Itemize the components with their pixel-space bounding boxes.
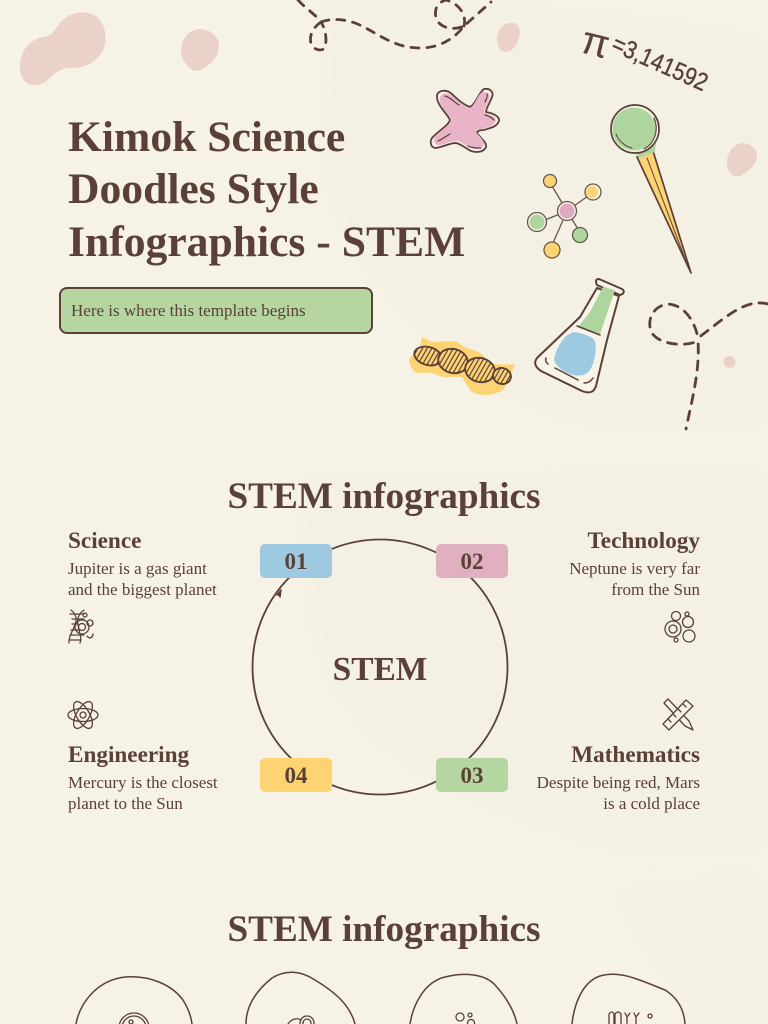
shape: bottom blob 2 [246,972,355,1024]
icon: dna [409,337,515,395]
badge 04 [260,758,332,792]
pink blob: top centre [497,23,520,52]
pi formula: =3,141592 [608,30,712,97]
text: science: Jupiter is a gas giant [68,559,207,578]
pi formula [577,18,712,97]
heading: section 3: STEM infographics [227,909,541,950]
text: technology: Technology [587,528,700,554]
icon: molecule [528,174,601,258]
title: Doodles Style [68,165,319,213]
text: technology [569,528,700,599]
icon: bottom dna [288,1016,314,1024]
badge 02 [436,544,508,578]
icon: technology cells [665,612,695,642]
badge 01 [260,544,332,578]
badge 01: 01 [284,549,308,574]
pink blob: right [727,143,757,177]
subtitle box [59,287,373,334]
text: technology: Neptune is very far [569,559,700,578]
text: mathematics: Mathematics [571,742,700,768]
badge 02: 02 [460,549,484,574]
pink blob: large [20,12,106,85]
shape: bottom blob 1 [76,977,192,1024]
icon: flask [535,279,624,392]
icon: bottom cell [119,1013,149,1024]
title: Kimok Science [68,112,345,160]
dashed path: bottom right [650,303,768,429]
text: mathematics: Despite being red, Mars [537,773,700,792]
text: science: and the biggest planet [68,580,217,599]
text: mathematics [537,742,700,813]
badge 04: 04 [284,763,308,788]
subtitle box: Here is where this template begins [71,301,306,320]
dashed path: top [298,0,491,50]
icon: bottom math [609,1012,652,1024]
shape: bottom blob 4 [572,974,685,1024]
badge 03: 03 [460,763,484,788]
center label: STEM [333,651,427,688]
text: engineering: Engineering [68,742,189,768]
text: science [68,528,217,599]
icon: pipette [611,105,691,273]
text: engineering [68,742,218,813]
pink blob: small [181,29,219,71]
title [68,112,465,266]
text: engineering: Mercury is the closest [68,773,218,792]
text: engineering: planet to the Sun [68,794,183,813]
icon: pink splat [431,89,499,152]
icon: mathematics pencil and ruler [663,699,693,730]
pi formula: π [577,18,614,67]
icon: bottom gears [456,1013,474,1024]
icon: science dna [69,610,93,643]
process circle [252,540,508,794]
shape: bottom blob 3 [410,974,517,1024]
text: science: Science [68,528,141,554]
heading: section 2: STEM infographics [227,476,541,517]
pink blob: dot [724,356,736,368]
badge 03 [436,758,508,792]
text: technology: from the Sun [611,580,700,599]
title: Infographics - STEM [68,218,465,266]
icon: engineering atom [68,699,98,731]
text: mathematics: is a cold place [603,794,700,813]
